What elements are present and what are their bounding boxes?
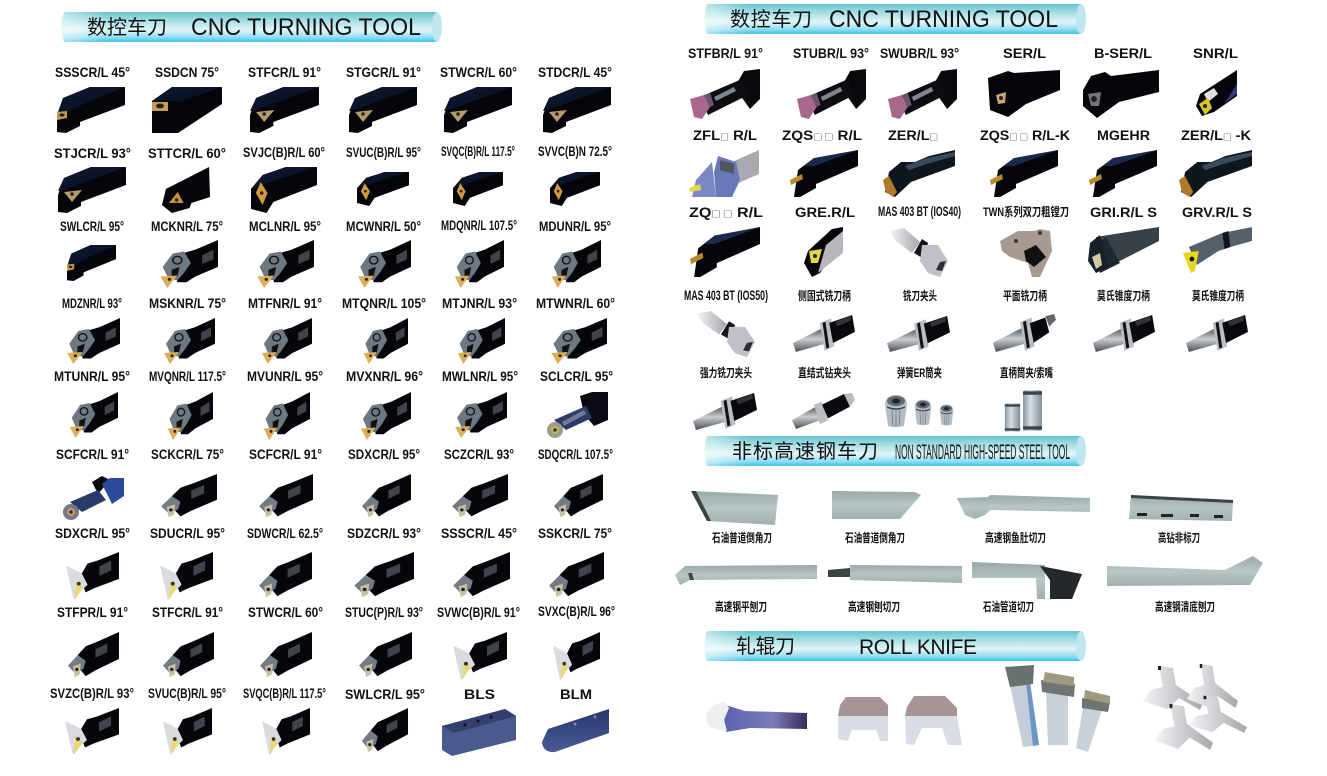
- steel tool: oil pipe chamfer 1: 石油普道倒角刀: [712, 530, 772, 545]
- tool: STFCR/L 91: [152, 605, 223, 677]
- roll knife: block 1: [838, 697, 888, 741]
- tool: SCFCR/L 91: [249, 447, 322, 517]
- tool: SVJC(B)R/L 60: [243, 145, 325, 213]
- steel tool: high-cobalt non-standard: 高钻非标刀: [1158, 530, 1200, 545]
- tool: SSKCR/L 75: [538, 526, 612, 597]
- tool: SDZCR/L 93: [347, 526, 421, 597]
- tool: MDZNR/L 93: [62, 296, 122, 364]
- steel tool: planer cutter: [828, 565, 962, 614]
- steel tool: fish belly cutter: 高速钢鱼肚切刀: [985, 530, 1046, 545]
- tool: STDCR/L 45: STDCR/L 45°: [538, 65, 612, 80]
- tool: MDUNR/L 95: [539, 219, 611, 288]
- tool: STWCR/L 60: [248, 605, 323, 677]
- tool: ZER/L -K: ZER/L □ -K: [1181, 128, 1251, 143]
- tool: SDZCR/L 93: SDZCR/L 93°: [347, 526, 421, 541]
- tool: power milling chuck: 强力铣刀夹头: [700, 365, 752, 380]
- banner: CNC turning tool, left: [62, 12, 442, 42]
- banner: roll knife: ROLL KNIFE: [859, 636, 977, 659]
- tool: STJCR/L 93: STJCR/L 93°: [54, 146, 131, 161]
- tool: BLM bar: BLM: [560, 687, 592, 702]
- tool: SVQC(B)R/L 117.5: [441, 144, 515, 206]
- tool: STJCR/L 93: [54, 146, 131, 213]
- tool: STTCR/L 60: [148, 146, 226, 213]
- tool: Morse taper holder 2: [1186, 288, 1248, 352]
- tool: MGEHR: [1089, 128, 1157, 197]
- tool: B-SER/L: B-SER/L: [1094, 46, 1152, 61]
- tool: side-fixed milling holder: 侧固式铣刀柄: [798, 288, 851, 303]
- tool: MVXNR/L 96: MVXNR/L 96°: [346, 369, 423, 384]
- tool: SCZCR/L 93: [444, 447, 514, 517]
- tool: milling chuck: [887, 288, 950, 352]
- tool: STWCR/L 60: STWCR/L 60°: [440, 65, 517, 80]
- tool: SVQC(B)R/L 117.5: SVQC(B)R/L 117.5°: [243, 686, 326, 701]
- tool: MDZNR/L 93: MDZNR/L 93°: [62, 296, 122, 311]
- tool: MVQNR/L 117.5: [149, 369, 226, 440]
- tool: ZER/L -K: [1179, 128, 1252, 197]
- tool: MDUNR/L 95: MDUNR/L 95°: [539, 219, 611, 234]
- tool: direct drill chuck: 直结式钻夹头: [798, 365, 851, 380]
- tool: SSDCN 75: [152, 65, 222, 133]
- steel tool: bottom-clearing planer: [1107, 556, 1263, 614]
- tool: GRI.R/L S: GRI.R/L S: [1090, 205, 1157, 220]
- tool: SVXC(B)R/L 96: SVXC(B)R/L 96°: [538, 604, 615, 619]
- tool: MCWNR/L 50: [346, 219, 421, 288]
- tool: SCZCR/L 93: SCZCR/L 93°: [444, 447, 514, 462]
- roll knife: T-shaped cutters: [1143, 664, 1247, 750]
- tool: MVXNR/L 96: [346, 369, 423, 440]
- tool: MCKNR/L 75: MCKNR/L 75°: [151, 219, 223, 234]
- tool: SVUC(B)R/L 95: [346, 145, 421, 206]
- tool: straight shank collets: 直柄筒夹/索嘴: [1000, 365, 1053, 380]
- roll knife: tall tooth tools: [1005, 665, 1110, 752]
- tool: MTJNR/L 93: MTJNR/L 93°: [442, 296, 517, 311]
- tool: MTWNR/L 60: MTWNR/L 60°: [536, 296, 615, 311]
- tool: MVUNR/L 95: MVUNR/L 95°: [247, 369, 323, 384]
- tool: SVXC(B)R/L 96: [538, 604, 615, 680]
- tool: ZER/L: [883, 128, 955, 197]
- tool: STFCR/L 91: STFCR/L 91°: [248, 65, 321, 80]
- tool: SER/L: [988, 46, 1060, 117]
- tool: SVVC(B)N 72.5: SVVC(B)N 72.5°: [538, 144, 612, 159]
- tool: STUBR/L 93: [793, 46, 869, 119]
- tool: ZFL R/L: ZFL □ R/L: [693, 128, 757, 143]
- tool: ZQS R/L-K: [980, 128, 1070, 197]
- roll knife: block 2: [905, 696, 962, 745]
- tool: direct drill chuck: [792, 365, 855, 429]
- tool: SVQC(B)R/L 117.5: SVQC(B)R/L 117.5°: [441, 144, 515, 159]
- tool: MTQNR/L 105: [342, 296, 426, 364]
- tool: STWCR/L 60: [440, 65, 517, 133]
- tool: MTUNR/L 95: [54, 369, 130, 438]
- tool: Morse taper holder 1: [1093, 288, 1155, 352]
- tool: ZER/L: ZER/L □: [888, 128, 938, 143]
- tool: SDQCR/L 107.5: SDQCR/L 107.5°: [538, 447, 613, 462]
- tool: SCFCR/L 91: SCFCR/L 91°: [249, 447, 322, 462]
- tool: GRV.R/L S: GRV.R/L S: [1182, 205, 1252, 220]
- tool: MAS 403 BT (IOS50): [684, 288, 768, 357]
- tool: SNR/L: [1193, 46, 1238, 116]
- tool: MWLNR/L 95: MWLNR/L 95°: [442, 369, 518, 384]
- tool: GRE.R/L: GRE.R/L: [795, 205, 855, 220]
- tool: straight shank collets: [1000, 365, 1053, 431]
- tool: STFPR/L 91: [57, 605, 128, 677]
- banner: CNC turning tool, left: 数控车刀: [87, 16, 167, 39]
- tool: SCLCR/L 95: SCLCR/L 95°: [540, 369, 613, 384]
- tool: SDXCR/L 95: SDXCR/L 95°: [348, 447, 420, 462]
- tool: MAS 403 BT (IOS50): MAS 403 BT (IOS50): [684, 288, 768, 303]
- tool: B-SER/L: [1083, 46, 1159, 118]
- tool: ZQ R/L: ZQ □ □ R/L: [689, 205, 763, 220]
- banner: roll knife: [704, 631, 1086, 661]
- tool: MTQNR/L 105: MTQNR/L 105°: [342, 296, 426, 311]
- tool: STFPR/L 91: STFPR/L 91°: [57, 605, 128, 620]
- tool: SVZC(B)R/L 93: [50, 686, 134, 755]
- tool: SDWCR/L 62.5: [247, 526, 323, 597]
- tool: MSKNR/L 75: MSKNR/L 75°: [149, 296, 226, 311]
- tool: SSSCR/L 45: [441, 526, 517, 597]
- steel tool: bottom-clearing planer: 高速钢清底刨刀: [1155, 599, 1215, 614]
- steel tool: fish belly cutter: [957, 495, 1090, 545]
- tool: ZQS R/L: ZQS □ □ R/L: [782, 128, 862, 143]
- tool: SVWC(B)R/L 91: [437, 605, 520, 680]
- tool: STUBR/L 93: STUBR/L 93°: [793, 46, 869, 61]
- tool: BLS block: [442, 687, 516, 756]
- tool: MTFNR/L 91: [248, 296, 322, 364]
- tool: STGCR/L 91: STGCR/L 91°: [346, 65, 421, 80]
- tool: Morse taper holder 1: 莫氏锥度刀柄: [1097, 288, 1150, 303]
- tool: MTFNR/L 91: MTFNR/L 91°: [248, 296, 322, 311]
- tool: SDXCR/L 95: [55, 526, 130, 600]
- banner: CNC turning tool, left: CNC TURNING TOOL: [191, 14, 421, 41]
- tool: SVUC(B)R/L 95: SVUC(B)R/L 95°: [148, 686, 226, 701]
- tool: GRV.R/L S: [1182, 205, 1252, 273]
- tool: SCFCR/L 91: SCFCR/L 91°: [56, 447, 129, 462]
- tool: MCKNR/L 75: [151, 219, 223, 288]
- steel tool: oil pipe chamfer 2: [832, 491, 921, 545]
- tool: STFBR/L 91: [688, 46, 763, 119]
- tool: SDWCR/L 62.5: SDWCR/L 62.5°: [247, 526, 323, 541]
- steel tool: high-cobalt non-standard: [1129, 495, 1233, 545]
- tool: SSSCR/L 45: SSSCR/L 45°: [441, 526, 517, 541]
- tool: MSKNR/L 75: [149, 296, 226, 364]
- tool: Morse taper holder 2: 莫氏锥度刀柄: [1192, 288, 1244, 303]
- banner: CNC turning tool, right: [704, 4, 1086, 34]
- tool: SDQCR/L 107.5: [538, 447, 613, 517]
- tool: MAS 403 BT (IOS40): MAS 403 BT (IOS40): [878, 204, 961, 219]
- tool: side-fixed milling holder: [793, 288, 855, 352]
- tool: SSDCN 75: SSDCN 75°: [155, 65, 219, 80]
- tool: SWLCR/L 95: SWLCR/L 95°: [60, 219, 124, 234]
- tool: MTUNR/L 95: MTUNR/L 95°: [54, 369, 130, 384]
- steel tool: oil pipe chamfer 2: 石油普道倒角刀: [845, 530, 905, 545]
- tool: SNR/L: SNR/L: [1193, 46, 1238, 61]
- tool: SCKCR/L 75: SCKCR/L 75°: [151, 447, 224, 462]
- tool: STFCR/L 91: STFCR/L 91°: [152, 605, 223, 620]
- tool: SDXCR/L 95: SDXCR/L 95°: [55, 526, 130, 541]
- tool: STWCR/L 60: STWCR/L 60°: [248, 605, 323, 620]
- tool: STFCR/L 91: [248, 65, 321, 133]
- tool: TWN series: [983, 204, 1069, 277]
- tool: SER/L: SER/L: [1003, 46, 1046, 61]
- tool: SSSCR/L 45: SSSCR/L 45°: [55, 65, 130, 80]
- tool: SVWC(B)R/L 91: SVWC(B)R/L 91°: [437, 605, 520, 620]
- tool: SDUCR/L 95: SDUCR/L 95°: [150, 526, 225, 541]
- tool: power milling chuck: [693, 365, 757, 430]
- tool: ZFL R/L: [689, 128, 759, 197]
- tool: STUC(P)R/L 93: [345, 605, 423, 677]
- tool: SWLCR/L 95: SWLCR/L 95°: [345, 687, 425, 702]
- steel tool: flat planer: 高速钢平刨刀: [715, 599, 767, 614]
- tool: ER spring collets: 弹簧ER筒夹: [897, 365, 942, 380]
- steel tool: oil pipe cutter: [972, 562, 1082, 614]
- tool: STDCR/L 45: [538, 65, 612, 133]
- tool: ER spring collets: [885, 365, 953, 427]
- tool: MTJNR/L 93: [442, 296, 517, 364]
- tool: ZQS R/L-K: ZQS□ □ R/L-K: [980, 128, 1070, 143]
- tool: STTCR/L 60: STTCR/L 60°: [148, 146, 226, 161]
- tool: TWN series: TWN系列双刀粗镗刀: [983, 204, 1069, 219]
- tool: SCKCR/L 75: [151, 447, 224, 517]
- tool: BLS block: BLS: [464, 687, 495, 702]
- tool: face mill holder: [993, 288, 1056, 352]
- tool: MWLNR/L 95: [442, 369, 518, 438]
- tool: MAS 403 BT (IOS40): [878, 204, 961, 277]
- banner: non standard high-speed steel tool: 非标高速钢车刀: [732, 440, 878, 463]
- tool: SWLCR/L 95: [60, 219, 124, 281]
- tool: MTWNR/L 60: [536, 296, 615, 364]
- tool: MDQNR/L 107.5: MDQNR/L 107.5°: [441, 218, 517, 233]
- steel tool: planer cutter: 高速钢刨切刀: [848, 599, 900, 614]
- banner: CNC turning tool, right: 数控车刀: [730, 8, 812, 31]
- steel tool: oil pipe chamfer 1: [691, 491, 778, 545]
- tool: MCWNR/L 50: MCWNR/L 50°: [346, 219, 421, 234]
- tool: SVUC(B)R/L 95: SVUC(B)R/L 95°: [346, 145, 421, 160]
- banner: non standard high-speed steel tool: [704, 436, 1086, 466]
- tool: SVZC(B)R/L 93: SVZC(B)R/L 93°: [50, 686, 134, 701]
- tool: MVQNR/L 117.5: MVQNR/L 117.5°: [149, 369, 226, 384]
- roll knife: blade: [706, 702, 807, 732]
- tool: SDUCR/L 95: [150, 526, 225, 600]
- tool: BLM bar: [542, 687, 609, 752]
- tool: SVVC(B)N 72.5: [538, 144, 612, 206]
- tool: STFBR/L 91: STFBR/L 91°: [688, 46, 763, 61]
- tool: SWUBR/L 93: SWUBR/L 93°: [880, 46, 959, 61]
- tool: SVQC(B)R/L 117.5: [243, 686, 326, 755]
- tool: GRE.R/L: [795, 205, 855, 277]
- tool: SWLCR/L 95: [345, 687, 425, 752]
- tool: SVUC(B)R/L 95: [148, 686, 226, 755]
- steel tool: oil pipe cutter: 石油管道切刀: [983, 599, 1034, 614]
- tool: SSSCR/L 45: [55, 65, 130, 133]
- tool: SDXCR/L 95: [348, 447, 420, 517]
- tool: ZQS R/L: [782, 128, 862, 197]
- text: NON STANDARD HIGH-SPEED STEEL TOOL: [895, 441, 1070, 464]
- tool: SSKCR/L 75: SSKCR/L 75°: [538, 526, 612, 541]
- tool: face mill holder: 平面铣刀柄: [1003, 288, 1047, 303]
- tool: STGCR/L 91: [346, 65, 421, 133]
- tool: MDQNR/L 107.5: [441, 218, 517, 288]
- tool: SCFCR/L 91: [56, 447, 129, 520]
- banner: CNC turning tool, right: CNC TURNING TOOL: [829, 6, 1058, 33]
- tool: SWUBR/L 93: [880, 46, 959, 119]
- banner: roll knife: 轧辊刀: [736, 635, 795, 658]
- tool: STUC(P)R/L 93: STUC(P)R/L 93°: [345, 605, 423, 620]
- tool: ZQ R/L: [689, 205, 763, 277]
- tool: milling chuck: 铣刀夹头: [903, 288, 937, 303]
- tool: GRI.R/L S: [1088, 205, 1159, 273]
- tool: SVJC(B)R/L 60: SVJC(B)R/L 60°: [243, 145, 325, 160]
- tool: SCLCR/L 95: [540, 369, 613, 438]
- tool: MGEHR: MGEHR: [1097, 128, 1150, 143]
- steel tool: flat planer: [675, 565, 817, 614]
- tool: MVUNR/L 95: [247, 369, 323, 440]
- tool: MCLNR/L 95: [249, 219, 321, 288]
- tool: MCLNR/L 95: MCLNR/L 95°: [249, 219, 321, 234]
